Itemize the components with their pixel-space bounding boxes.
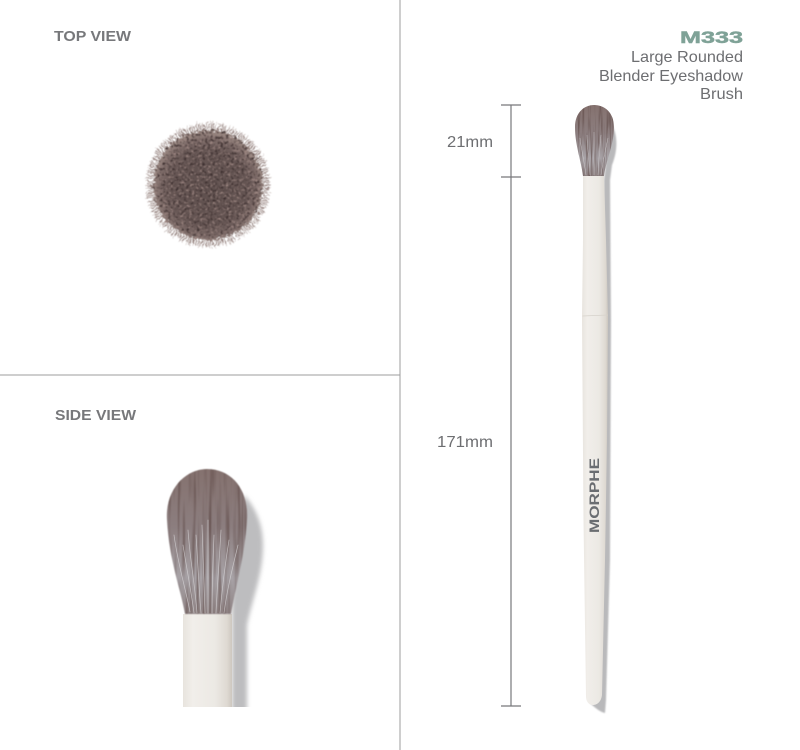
panel dividers — [0, 0, 400, 750]
dimension scale — [501, 105, 521, 706]
side view ferrule — [183, 614, 232, 707]
full brush bristles — [575, 105, 614, 176]
product name: Brush — [700, 86, 743, 103]
full brush — [575, 105, 616, 713]
product title block — [599, 28, 743, 103]
heading: side view: SIDE VIEW — [55, 407, 137, 424]
brush top view photo — [148, 125, 268, 245]
dimension label: 171mm: 171mm — [437, 434, 493, 451]
product code: M333 — [680, 28, 743, 47]
product name — [599, 49, 743, 103]
product name: Large Rounded — [631, 49, 743, 66]
brush side view photo — [167, 469, 263, 720]
brand name on handle: MORPHE — [587, 458, 602, 533]
product name: Blender Eyeshadow — [599, 68, 743, 85]
dimension label: 21mm: 21mm — [447, 134, 493, 151]
side view bristles — [167, 469, 247, 614]
heading: top view: TOP VIEW — [54, 28, 132, 45]
full brush shadow — [590, 122, 616, 713]
side view shadow — [232, 495, 263, 720]
full brush handle — [582, 176, 608, 705]
